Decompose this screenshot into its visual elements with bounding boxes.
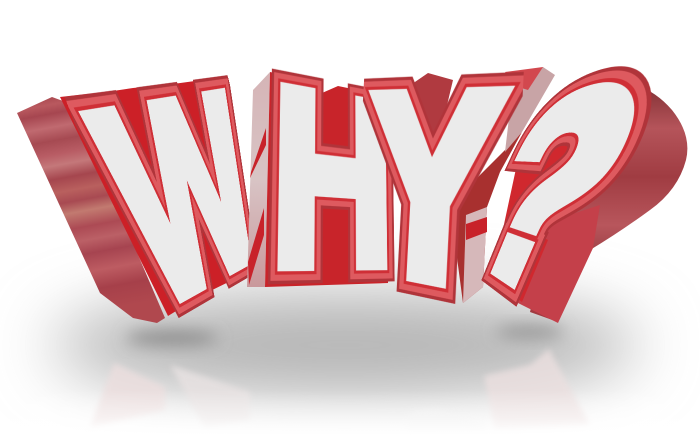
question mark [459, 0, 700, 370]
letter Y [361, 32, 555, 353]
Y face: Y [361, 32, 510, 353]
H face: H [269, 35, 394, 322]
Y face: Y [361, 32, 510, 353]
H face: H [269, 35, 394, 322]
letter W [17, 40, 277, 360]
H face: H [269, 35, 394, 322]
W face: W [63, 40, 277, 360]
W face: W [63, 40, 277, 360]
Y face: Y [361, 32, 510, 353]
W face: W [63, 40, 277, 360]
letter H [247, 35, 395, 322]
Y face: Y [361, 32, 510, 353]
W face: W [63, 40, 277, 360]
H face: H [269, 35, 394, 322]
